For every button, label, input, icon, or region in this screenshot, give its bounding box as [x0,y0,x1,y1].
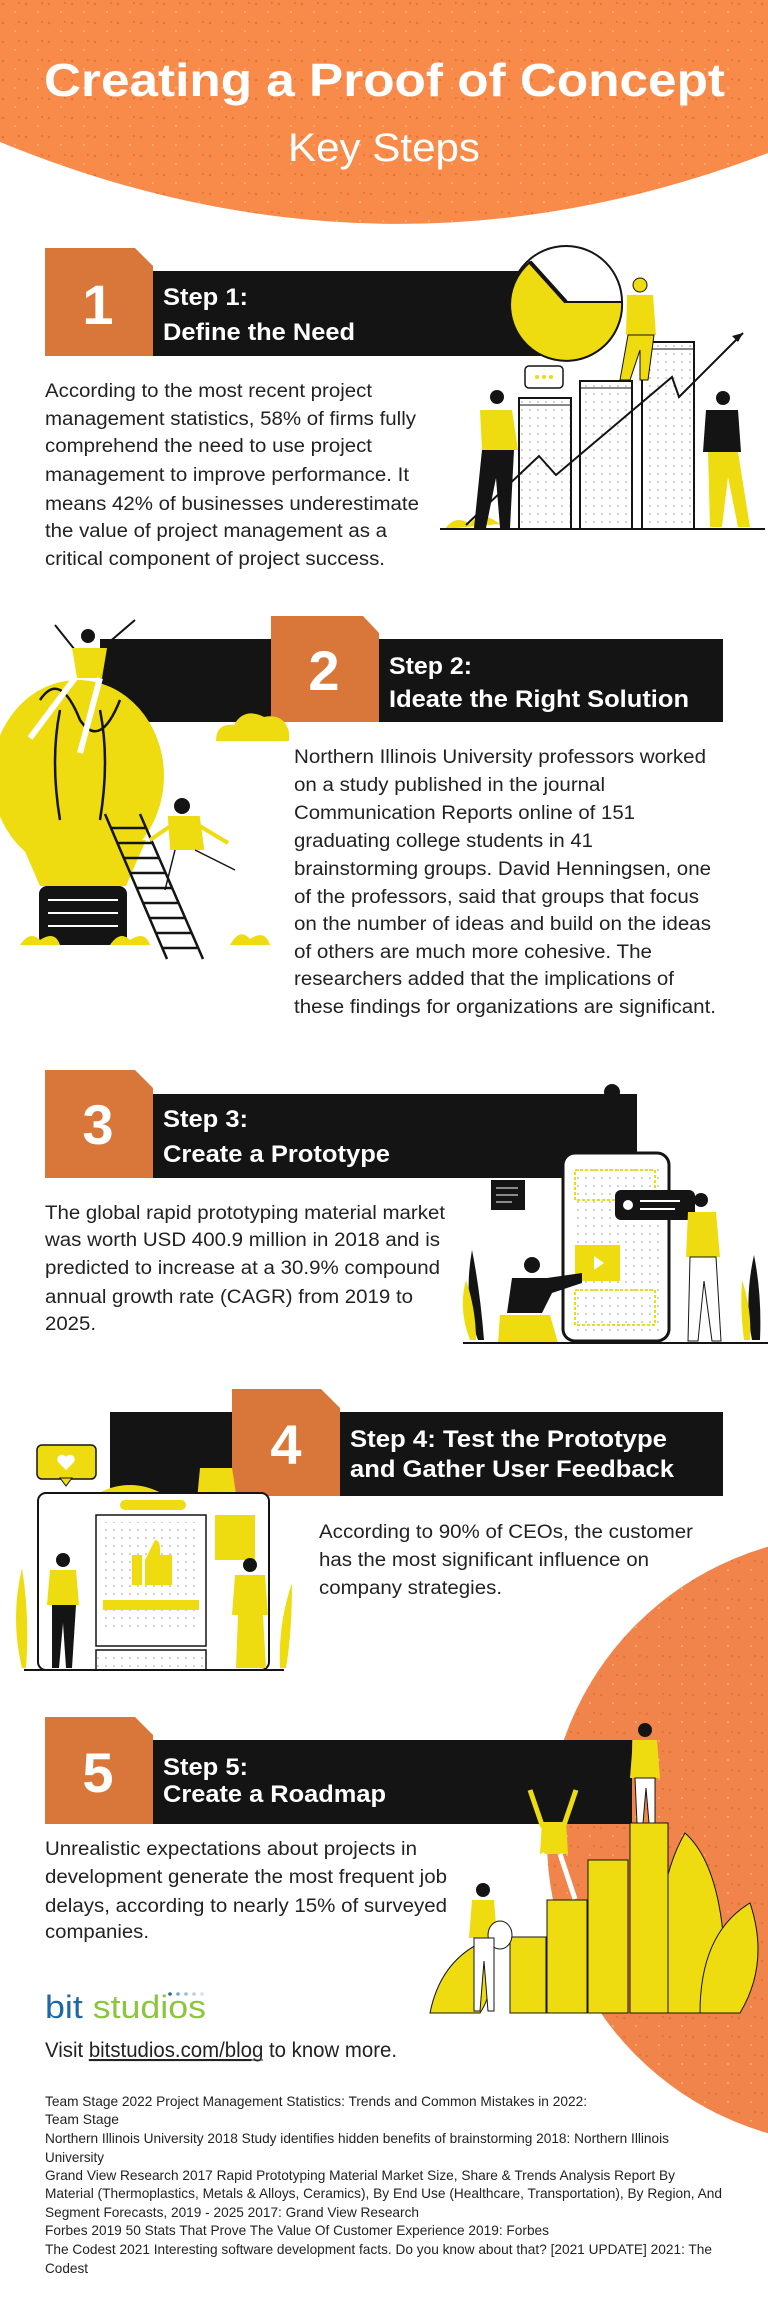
illustration: roadmap steps [430,1723,758,2013]
step 3 body text: was worth USD 400.9 million in 2018 and is [44,1230,440,1251]
step 1 body text: management to improve performance. It [45,465,410,486]
illustration: prototype phone [463,1084,768,1343]
logo: bit studios: bit studios [45,1989,206,2025]
step 2 body text: brainstorming groups. David Henningsen, one [294,859,711,880]
step 2 body text: these findings for organizations are significant. [294,997,716,1018]
step 3 header: Create a Prototype [163,1141,390,1168]
step 3 header [45,1070,637,1178]
references: Forbes 2019 50 Stats That Prove The Value Of Customer Experience 2019: Forbes [45,2222,549,2238]
step 4 body text: has the most significant influence on [319,1550,649,1571]
references: Codest [45,2260,88,2276]
step 1 body text: According to the most recent project [45,381,373,402]
orange circle background [547,1535,768,2145]
step 4 header [110,1389,723,1496]
step 4 header: and Gather User Feedback [350,1456,675,1483]
step 1 body text [45,381,419,570]
references: University [45,2149,104,2165]
step 3 body text: 2025. [45,1314,96,1335]
step 1 header: 1 [82,273,114,336]
step 2 header: 2 [308,639,340,702]
call to action: Visit bitstudios.com/blog to know more. [45,2039,397,2062]
step 2 body text: Communication Reports online of 151 [294,803,635,824]
step 1 header: Step 1: [163,284,248,311]
references: Segment Forecasts, 2019 - 2025 2017: Grand View Research [45,2204,419,2220]
references: Team Stage 2022 Project Management Statistics: Trends and Common Mistakes in 2022: [45,2093,587,2109]
step 3 header: Step 3: [163,1106,248,1133]
step 1 body text: management statistics, 58% of firms fully [45,409,417,430]
step 5 body text: development generate the most frequent job [45,1867,447,1888]
step 1 header: Define the Need [163,319,355,346]
step 1 body text: the value of project management as a [45,521,387,542]
step 5 body text: delays, according to nearly 15% of surveyed [45,1896,447,1917]
step 2 body text [294,747,716,1018]
step 2 body text: researchers added that the implications of [294,969,675,990]
step 1 body text: means 42% of businesses underestimate [45,494,419,515]
step 1 body text: comprehend the need to use project [45,436,373,457]
step 4 header: Step 4: Test the Prototype [350,1426,667,1453]
step 3 body text: annual growth rate (CAGR) from 2019 to [45,1287,413,1308]
step 4 body text: company strategies. [319,1578,502,1599]
step 2 body text: graduating college students in 41 [294,831,593,852]
references [45,2093,722,2276]
title: Creating a Proof of Concept [44,54,725,106]
references: Team Stage [45,2111,119,2127]
step 3 body text: predicted to increase at a 30.9% compound [45,1258,440,1279]
step 2 body text: of others are much more cohesive. The [294,942,652,963]
references: Northern Illinois University 2018 Study identifies hidden benefits of brainstorming 2018: Northern Illinois [45,2130,669,2146]
references: The Codest 2021 Interesting software development facts. Do you know about that? [2021 UPDATE] 2021: The [45,2241,712,2257]
step 3 body text: The global rapid prototyping material market [45,1203,446,1224]
step 4 header: 4 [270,1413,302,1476]
step 5 header: Create a Roadmap [163,1781,386,1808]
illustration: light bulb brainstorming [0,620,289,959]
step 2 header: Step 2: [389,653,472,680]
step 5 header: Step 5: [163,1754,248,1781]
subtitle: Key Steps [288,126,480,170]
step 2 header: Ideate the Right Solution [389,686,689,713]
references: Grand View Research 2017 Rapid Prototyping Material Market Size, Share & Trends Analysis Report By [45,2167,675,2183]
references: Material (Thermoplastics, Metals & Alloys, Ceramics), By End Use (Healthcare, Transportation), By Region, And [45,2185,722,2201]
step 2 body text: of the professors, said that groups that focus [294,887,699,908]
step 2 body text: on the number of ideas and build on the ideas [294,914,711,935]
illustration: growth chart team [440,246,765,529]
step 5 body text: Unrealistic expectations about projects in [45,1839,417,1860]
step 1 header [45,248,543,356]
step 5 body text [45,1839,447,1943]
illustration: user feedback screen [16,1445,292,1670]
step 5 body text: companies. [45,1922,149,1943]
step 3 body text [44,1203,446,1335]
step 4 body text: According to 90% of CEOs, the customer [319,1522,694,1543]
step 3 header: 3 [82,1093,114,1156]
step 2 body text: Northern Illinois University professors worked [294,747,706,768]
step 5 header: 5 [82,1741,114,1804]
header background [0,0,768,224]
step 1 body text: critical component of project success. [45,549,385,570]
step 4 body text [319,1522,694,1599]
step 5 header [45,1717,632,1824]
step 2 header [100,616,723,722]
step 2 body text: on a study published in the journal [294,775,605,796]
